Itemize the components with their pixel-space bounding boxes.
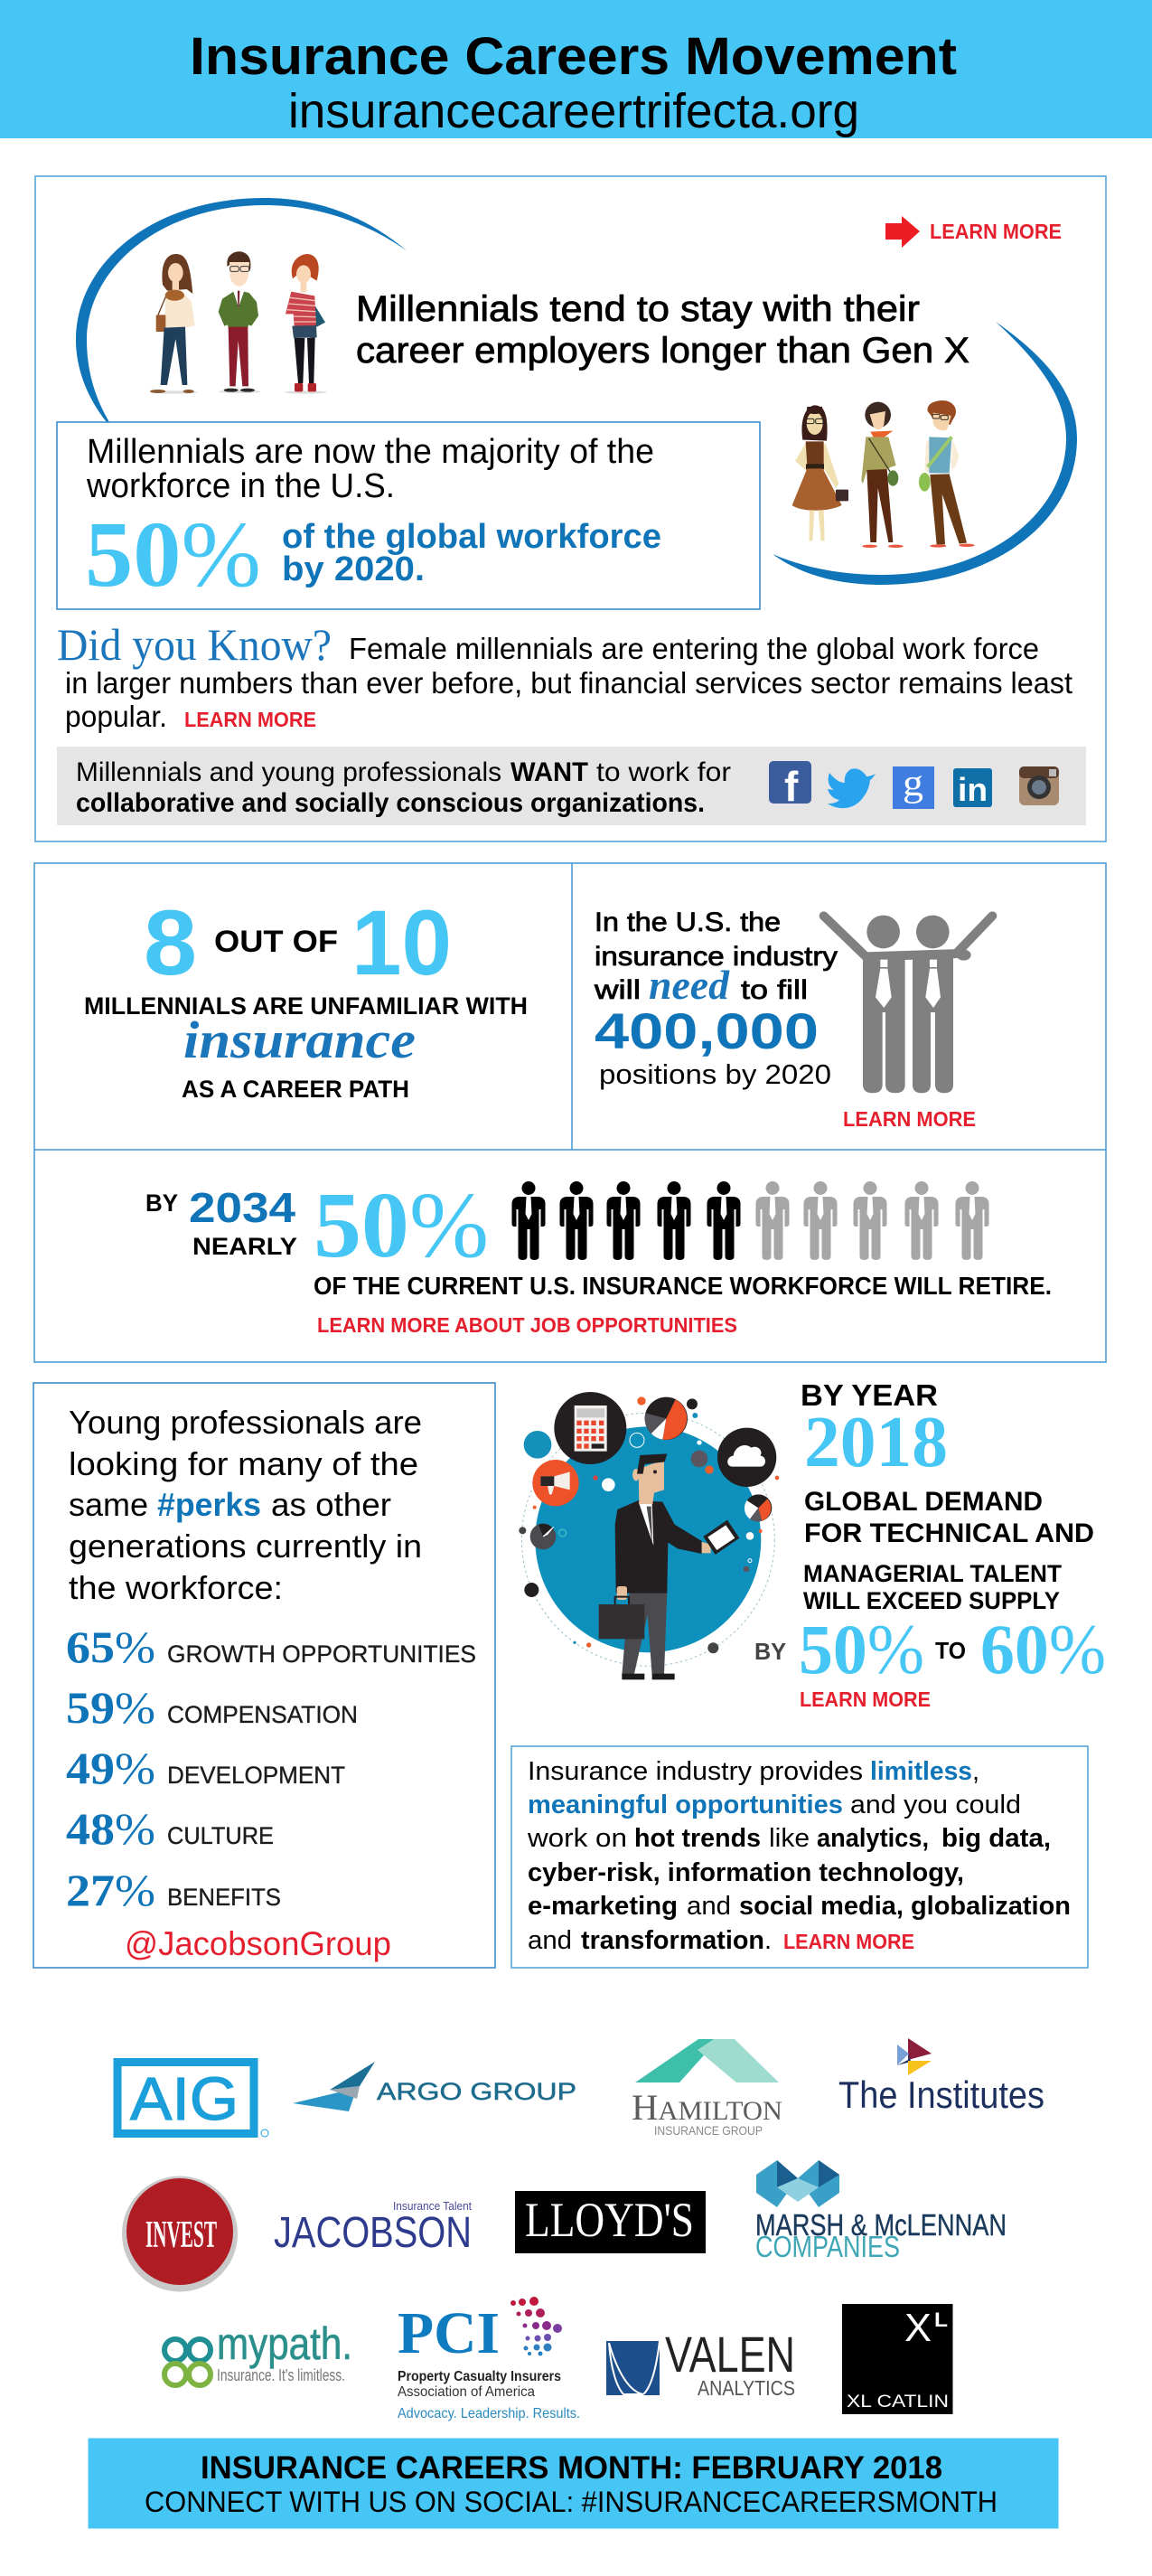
title: Insurance Careers Movement xyxy=(190,27,957,86)
panel: limitless opportunities: like xyxy=(769,1824,810,1853)
illustration: businessman with tech icons xyxy=(519,1392,779,1679)
logo: XL Catlin: XL CATLIN xyxy=(847,2393,949,2411)
logo: Invest xyxy=(122,2176,238,2292)
callout: majority of workforce: of the global workforce xyxy=(282,518,661,556)
logo: mypath: mypath. xyxy=(217,2318,352,2369)
stat: 2034 retirement: BY xyxy=(145,1189,178,1217)
stat: 400,000 positions: will xyxy=(594,975,641,1005)
logo: Argo Group xyxy=(293,2062,576,2111)
handle: @JacobsonGroup xyxy=(125,1925,391,1962)
stat: talent demand by 2018: LEARN MORE xyxy=(800,1688,931,1711)
stat: talent demand by 2018: 60% xyxy=(980,1610,1106,1688)
perk: development: DEVELOPMENT xyxy=(167,1762,345,1789)
stat: 8 out of 10: OUT OF xyxy=(214,925,338,959)
logo: Marsh & McLennan: MARSH & McLENNAN xyxy=(755,2208,1007,2242)
panel: limitless opportunities: LEARN MORE xyxy=(783,1930,914,1953)
panel: perks xyxy=(33,1383,495,1968)
logo: PCI: Advocacy. Leadership. Results. xyxy=(398,2406,580,2421)
stat: 8 out of 10: 8 xyxy=(144,891,197,994)
panel: limitless opportunities: social media, globalization xyxy=(739,1892,1071,1921)
panel: limitless opportunities: Insurance industry provides xyxy=(528,1757,863,1786)
perks intro text: generations currently in xyxy=(69,1528,422,1565)
stat: 400,000 positions: positions by 2020 xyxy=(599,1058,831,1090)
stat: 50 percent: 50% xyxy=(85,503,261,606)
stat: 2034 retirement: OF THE CURRENT U.S. INSURANCE WORKFORCE WILL RETIRE. xyxy=(314,1272,1052,1300)
perks intro text: #perks xyxy=(157,1486,261,1523)
stat: talent demand by 2018: BY xyxy=(754,1638,786,1665)
stat: talent demand by 2018: MANAGERIAL TALENT xyxy=(803,1560,1062,1587)
stat: talent demand by 2018: BY YEAR xyxy=(801,1378,938,1412)
stat: 2034 retirement: LEARN MORE ABOUT JOB OPPORTUNITIES xyxy=(317,1313,737,1337)
icon: facebook: f xyxy=(784,763,799,810)
icon: google xyxy=(893,763,934,809)
panel: limitless opportunities: hot trends xyxy=(634,1824,761,1853)
stat: 8 out of 10: 10 xyxy=(351,891,452,994)
stat: 400,000 positions: 400,000 xyxy=(595,1002,819,1059)
icon: two businessmen cheering xyxy=(824,916,992,1093)
stat: 400,000 positions: insurance industry xyxy=(595,942,838,972)
panel: limitless opportunities: . xyxy=(764,1926,772,1955)
grey band: social message: WANT xyxy=(510,757,588,787)
callout: majority of workforce: workforce in the U.S. xyxy=(86,467,395,505)
logo: Hamilton: HAMILTON xyxy=(632,2087,782,2128)
logo: The Institutes xyxy=(838,2038,1044,2116)
arc: top left swoosh xyxy=(76,198,407,422)
panel: limitless opportunities xyxy=(511,1746,1088,1968)
logo: The Institutes: The Institutes xyxy=(838,2073,1044,2116)
did you know block: Female millennials are entering the global work force xyxy=(349,632,1039,665)
headline text: career employers longer than Gen X xyxy=(356,331,969,371)
stat: 2034 retirement: 2034 xyxy=(189,1184,295,1231)
perk: compensation: 59% xyxy=(66,1682,155,1733)
perk: culture: 48% xyxy=(66,1803,155,1854)
perks intro text: looking for many of the xyxy=(69,1445,418,1482)
icon: linkedin xyxy=(953,768,992,808)
stat: 400,000 positions xyxy=(594,907,838,1090)
perk: culture: CULTURE xyxy=(167,1822,274,1849)
panel: limitless opportunities: work on xyxy=(527,1824,627,1853)
panel: millennials xyxy=(35,176,1106,841)
panel: limitless opportunities: and xyxy=(687,1892,731,1921)
perk: development: 49% xyxy=(66,1743,155,1793)
header banner xyxy=(0,0,1152,138)
grey band: social message xyxy=(57,747,1086,825)
panel: limitless opportunities: transformation xyxy=(581,1926,764,1955)
learn more link: LEARN MORE xyxy=(843,1107,976,1131)
logo: Marsh & McLennan: COMPANIES xyxy=(755,2230,900,2263)
logo: PCI: Association of America xyxy=(398,2384,535,2400)
did you know block xyxy=(57,619,1072,733)
headline text: Millennials tend to stay with their xyxy=(356,289,920,329)
stat: 400,000 positions: to fill xyxy=(741,975,808,1005)
panel: limitless opportunities: limitless xyxy=(870,1757,972,1786)
callout: majority of workforce: Millennials are now the majority of the xyxy=(87,433,654,471)
stat: 400,000 positions: need xyxy=(649,962,730,1008)
logo: Marsh & McLennan xyxy=(755,2160,1007,2263)
perks intro text: same xyxy=(69,1486,148,1523)
logo: mypath xyxy=(164,2318,352,2385)
logo: Valen Analytics: VALEN xyxy=(665,2326,795,2383)
logo: AIG: AIG xyxy=(130,2065,239,2133)
perk: compensation: COMPENSATION xyxy=(167,1701,358,1728)
logo: XL Catlin: L xyxy=(934,2308,948,2331)
panel: workforce statistics frame xyxy=(34,863,1106,1362)
stat: talent demand by 2018: FOR TECHNICAL AND xyxy=(804,1518,1094,1548)
logo: Hamilton: INSURANCE GROUP xyxy=(654,2123,763,2138)
logo: PCI: PCI xyxy=(398,2300,500,2366)
perks intro text: as other xyxy=(271,1486,391,1523)
logo: Valen Analytics: ANALYTICS xyxy=(698,2376,795,2400)
callout: majority of workforce: by 2020. xyxy=(282,550,425,588)
stat: 400,000 positions: In the U.S. the xyxy=(595,907,781,937)
learn more link: LEARN MORE xyxy=(930,220,1062,243)
stat: 2034 retirement: NEARLY xyxy=(192,1233,297,1260)
stat: 8 out of 10: MILLENNIALS ARE UNFAMILIAR WITH xyxy=(84,992,528,1020)
perk: culture xyxy=(66,1803,274,1854)
stat: talent demand by 2018: WILL EXCEED SUPPLY xyxy=(803,1587,1060,1614)
stat: 2034 retirement xyxy=(145,1173,1052,1337)
logo: Invest: INVEST xyxy=(145,2214,217,2256)
callout: majority of workforce xyxy=(57,422,760,609)
did you know block: in larger numbers than ever before, but financial services sector remains least xyxy=(65,666,1072,700)
perks intro text: Young professionals are xyxy=(69,1404,422,1441)
panel: limitless opportunities: and xyxy=(528,1926,572,1955)
grey band: social message: collaborative and socially conscious organizations. xyxy=(76,788,705,818)
website url: insurancecareertrifecta.org xyxy=(288,84,859,138)
stat: talent demand by 2018: 50% xyxy=(799,1610,924,1688)
logo: Jacobson: JACOBSON xyxy=(274,2209,472,2257)
pictogram: ten workers xyxy=(511,1181,988,1260)
footer banner: INSURANCE CAREERS MONTH: FEBRUARY 2018 xyxy=(201,2450,942,2486)
logo: XL Catlin: X xyxy=(904,2306,932,2350)
sponsor logos xyxy=(117,2038,1044,2421)
stat: talent demand by 2018: 2018 xyxy=(804,1403,948,1482)
illustration: three millennials left xyxy=(150,251,327,394)
icon: facebook xyxy=(769,761,811,810)
panel: limitless opportunities: , xyxy=(972,1757,979,1786)
perk: growth opportunities: GROWTH OPPORTUNITIES xyxy=(167,1641,476,1668)
logo: Lloyd's: LLOYD'S xyxy=(525,2193,694,2247)
perk: growth opportunities: 65% xyxy=(66,1622,155,1672)
grey band: social message: Millennials and young professionals xyxy=(76,757,501,787)
panel: limitless opportunities: e-marketing xyxy=(528,1892,678,1921)
did you know block: popular. xyxy=(65,700,167,733)
arc: right swoosh xyxy=(773,322,1077,585)
perk: benefits: BENEFITS xyxy=(167,1884,281,1911)
panel: limitless opportunities: meaningful opportunities xyxy=(528,1791,843,1819)
stat: 2034 retirement: 50% xyxy=(314,1173,489,1277)
stat: talent demand by 2018: TO xyxy=(935,1637,966,1664)
logo: PCI xyxy=(398,2297,580,2421)
logo: Hamilton xyxy=(632,2039,782,2138)
perk: development xyxy=(66,1743,345,1793)
logo: Argo Group: ARGO GROUP xyxy=(377,2078,576,2105)
perk: growth opportunities xyxy=(66,1622,476,1672)
panel: limitless opportunities: and you could xyxy=(850,1791,1021,1819)
perks intro text xyxy=(69,1404,422,1606)
icon: linkedin: in xyxy=(958,771,988,808)
grey band: social message: to work for xyxy=(596,757,731,787)
panel: limitless opportunities: big data, xyxy=(941,1824,1051,1853)
footer banner: CONNECT WITH US ON SOCIAL: #INSURANCECAREERSMONTH xyxy=(145,2486,997,2518)
headline text xyxy=(356,289,969,371)
logo: Valen Analytics xyxy=(606,2326,795,2400)
icon: google: g xyxy=(903,763,923,804)
logo: AIG xyxy=(117,2063,268,2137)
did you know block: LEARN MORE xyxy=(184,708,316,731)
illustration: three millennials right xyxy=(792,400,975,548)
logo: Jacobson: Insurance Talent xyxy=(393,2199,472,2213)
icon: instagram xyxy=(1019,766,1059,805)
icon: red arrow xyxy=(885,216,920,248)
stat: 8 out of 10: insurance xyxy=(183,1011,416,1069)
stat: 8 out of 10: AS A CAREER PATH xyxy=(182,1076,409,1103)
perk: compensation xyxy=(66,1682,358,1733)
perk: benefits xyxy=(66,1865,281,1915)
panel: limitless opportunities: analytics, xyxy=(817,1824,929,1853)
panel: limitless opportunities: cyber-risk, information technology, xyxy=(528,1858,964,1887)
perks intro text: the workforce: xyxy=(69,1569,283,1606)
logo: PCI: Property Casualty Insurers xyxy=(398,2369,561,2384)
footer banner xyxy=(89,2439,1059,2529)
perk: benefits: 27% xyxy=(66,1865,155,1915)
stat: talent demand by 2018 xyxy=(754,1378,1106,1711)
did you know block: Did you Know? xyxy=(57,619,332,670)
stat: 8 out of 10 xyxy=(84,891,528,1103)
icon: twitter xyxy=(828,768,876,808)
logo: mypath: Insurance. It's limitless. xyxy=(217,2366,345,2384)
logo: XL Catlin xyxy=(842,2304,952,2414)
stat: talent demand by 2018: GLOBAL DEMAND xyxy=(804,1487,1043,1517)
